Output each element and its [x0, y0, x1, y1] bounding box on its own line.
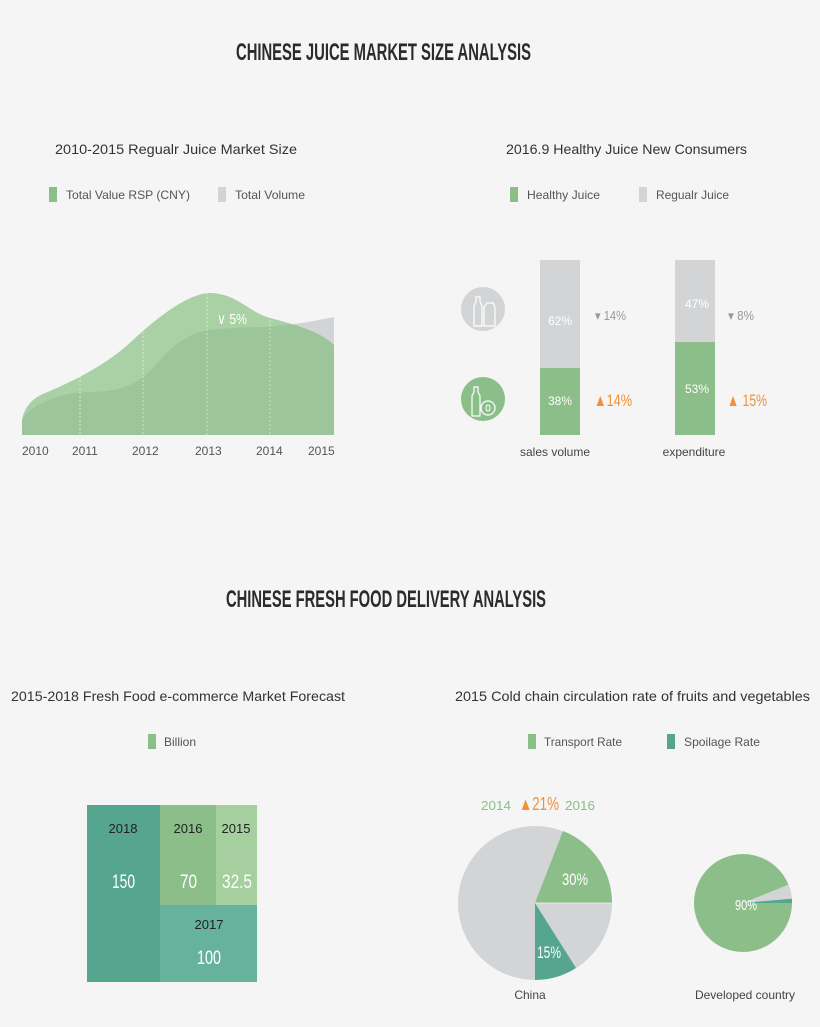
- bar: expenditure: 53%: [685, 382, 709, 396]
- treemap: 2015: [222, 821, 250, 836]
- label: 2014 to 2016 growth: 2016: [565, 798, 595, 813]
- change labels: ▲14%: [594, 391, 632, 410]
- pie: developed country: [694, 854, 795, 1002]
- icon: regular juice: [461, 287, 505, 331]
- label: 2014 to 2016 growth: [481, 794, 595, 814]
- bar: expenditure: expenditure: [663, 445, 726, 459]
- treemap: 2017: [195, 917, 223, 932]
- legend: billion: [148, 734, 196, 749]
- treemap: 2016: [174, 821, 202, 836]
- heading: regular juice market size: 2010-2015 Regualr Juice Market Size: [55, 141, 297, 157]
- legend: area chart: Total Volume: [235, 188, 305, 202]
- area chart: 2015: [308, 444, 335, 458]
- treemap: 150: [112, 872, 135, 893]
- legend: pies: Transport Rate: [544, 735, 622, 749]
- pie: developed country: Developed country: [695, 988, 795, 1002]
- area chart: 2013: [195, 444, 222, 458]
- area chart: 2014: [256, 444, 283, 458]
- area chart: 2012: [132, 444, 159, 458]
- bar: sales volume: [520, 260, 590, 459]
- heading: healthy juice consumers: 2016.9 Healthy Juice New Consumers: [506, 141, 747, 157]
- area chart: [22, 293, 335, 458]
- treemap: 32.5: [222, 872, 252, 893]
- title: juice market: CHINESE JUICE MARKET SIZE ANALYSIS: [236, 39, 531, 66]
- change labels: [594, 308, 767, 410]
- bar: expenditure: [663, 260, 726, 459]
- title: fresh food: CHINESE FRESH FOOD DELIVERY ANALYSIS: [226, 586, 546, 613]
- bar: expenditure: 47%: [685, 297, 709, 311]
- pie: China: 15%: [537, 943, 561, 962]
- change labels: ▾ 14%: [595, 308, 626, 323]
- legend: bars: Healthy Juice: [527, 188, 600, 202]
- pie: China: [458, 826, 612, 1002]
- icon: healthy juice: [461, 377, 505, 421]
- legend: bars: [510, 187, 729, 202]
- legend: billion: Billion: [164, 735, 196, 749]
- legend: pies: [528, 734, 760, 749]
- area chart: 2011: [72, 444, 98, 458]
- pie: China: China: [514, 988, 546, 1002]
- bar: sales volume: 62%: [548, 314, 572, 328]
- legend: area chart: Total Value RSP (CNY): [66, 188, 190, 202]
- bar: sales volume: 38%: [548, 394, 572, 408]
- legend: bars: Regualr Juice: [656, 188, 729, 202]
- area chart: ∨ 5%: [217, 311, 247, 328]
- treemap: 70: [180, 872, 197, 893]
- treemap: [87, 805, 257, 982]
- change labels: ▲ 15%: [727, 391, 767, 410]
- label: 2014 to 2016 growth: 2014: [481, 798, 511, 813]
- change labels: ▾ 8%: [728, 308, 754, 323]
- label: 2014 to 2016 growth: ▲21%: [519, 794, 559, 814]
- treemap: 100: [197, 948, 221, 969]
- bar: sales volume: sales volume: [520, 445, 590, 459]
- legend: pies: Spoilage Rate: [684, 735, 760, 749]
- legend: area chart: [49, 187, 305, 202]
- area chart: 2010: [22, 444, 49, 458]
- heading: e-commerce forecast: 2015-2018 Fresh Food e-commerce Market Forecast: [11, 688, 345, 704]
- pie: China: 30%: [562, 870, 588, 889]
- treemap: 2018: [109, 821, 137, 836]
- pie: developed country: 90%: [735, 897, 757, 914]
- heading: cold chain: 2015 Cold chain circulation rate of fruits and vegetables: [455, 688, 810, 704]
